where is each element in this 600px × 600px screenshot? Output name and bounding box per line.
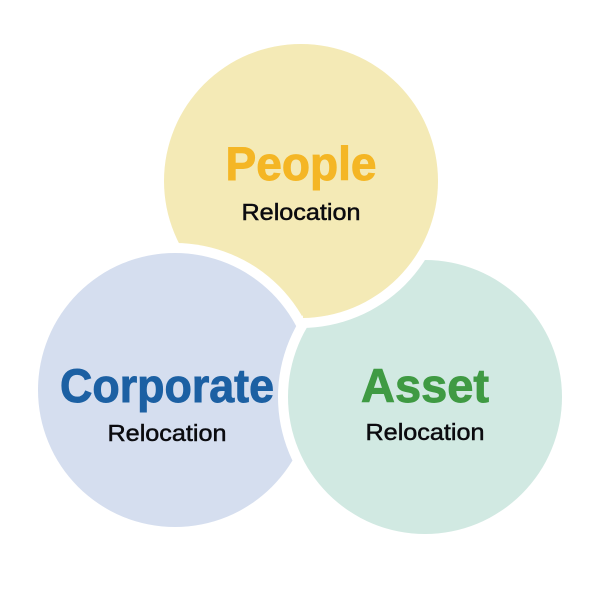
circle: asset	[278, 250, 572, 544]
label: people: Relocation	[242, 199, 360, 225]
label: asset: Asset	[361, 359, 489, 412]
people circle overlap over asset	[303, 250, 425, 328]
label: corporate	[60, 359, 274, 446]
label: asset: Relocation	[366, 419, 484, 445]
label: people: People	[226, 137, 376, 190]
venn diagram: relocation types	[38, 44, 562, 534]
circle: people	[164, 44, 438, 318]
label: asset	[361, 359, 489, 445]
label: corporate: Corporate	[60, 359, 274, 412]
circle: corporate	[28, 243, 322, 537]
label: corporate: Relocation	[108, 420, 226, 446]
label: people	[226, 137, 376, 225]
